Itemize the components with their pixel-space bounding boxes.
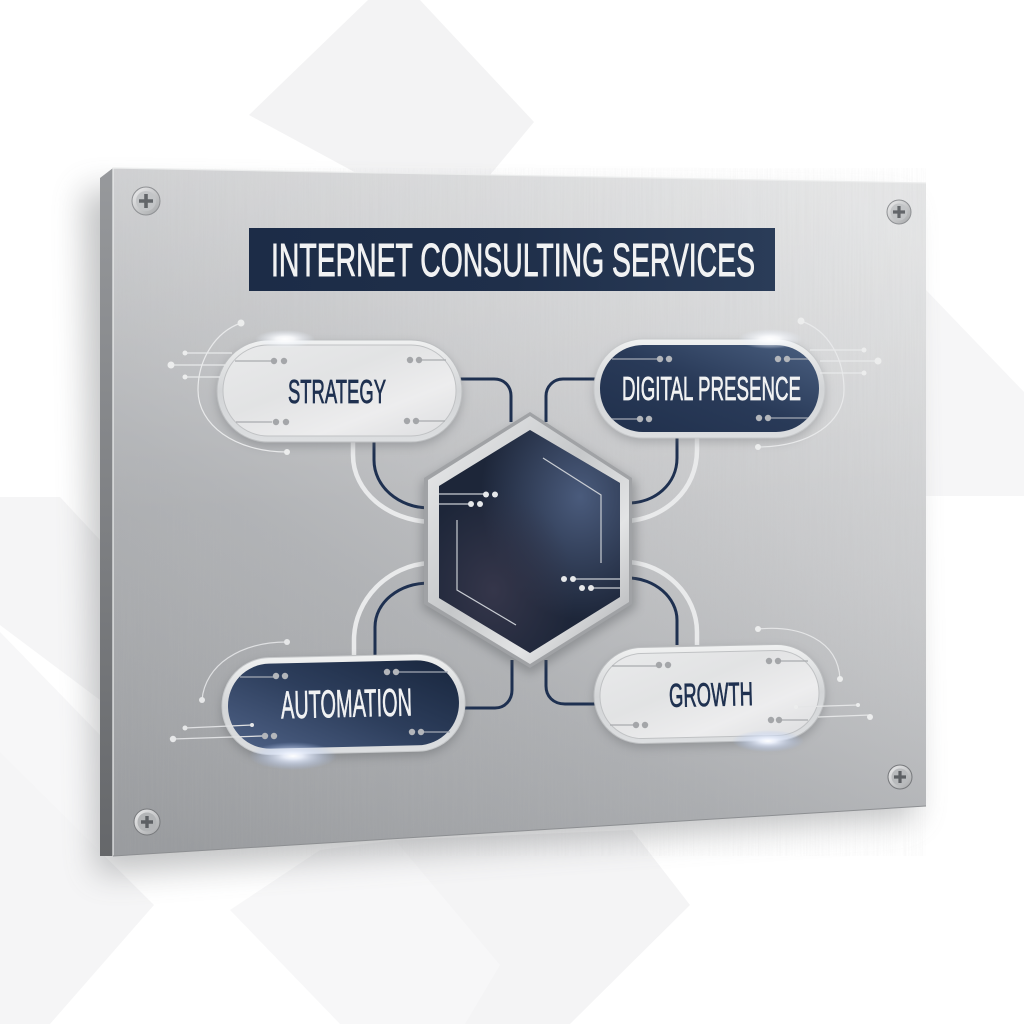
panel: strategy	[168, 320, 462, 455]
strategy circuit	[171, 323, 446, 452]
highlight: digital presence flare	[738, 329, 802, 349]
plate side edge	[100, 168, 113, 856]
screw: top left	[132, 187, 160, 215]
metal plate	[100, 168, 926, 856]
highlight: strategy flare	[255, 330, 315, 348]
title banner	[249, 228, 775, 291]
plate face	[113, 168, 926, 856]
screw: bottom right	[888, 765, 912, 789]
hexagon dots	[468, 492, 594, 591]
screw: top right	[887, 200, 911, 224]
white connectors	[353, 436, 697, 655]
automation circuit	[170, 639, 450, 742]
panel: growth	[593, 643, 826, 749]
highlight: automation flare	[249, 742, 337, 770]
digital presence circuit	[612, 321, 878, 447]
growth circuit	[610, 626, 873, 728]
hexagon circuit traces	[439, 458, 620, 625]
growth label: GROWTH	[669, 675, 753, 714]
hexagon face	[439, 430, 620, 653]
navy connectors	[374, 379, 677, 708]
connectors: pills to hexagon	[353, 379, 697, 708]
strategy label: STRATEGY	[288, 373, 386, 410]
plate shadow	[84, 190, 915, 874]
panel: automation	[221, 653, 466, 760]
panel: digital presence	[594, 318, 882, 450]
central hexagon	[422, 412, 636, 674]
automation label: AUTOMATION	[281, 681, 412, 727]
screw: bottom left	[134, 809, 160, 835]
hexagon rim	[424, 412, 632, 668]
highlight: growth flare	[732, 730, 804, 752]
digital presence label: DIGITAL PRESENCE	[622, 370, 801, 407]
